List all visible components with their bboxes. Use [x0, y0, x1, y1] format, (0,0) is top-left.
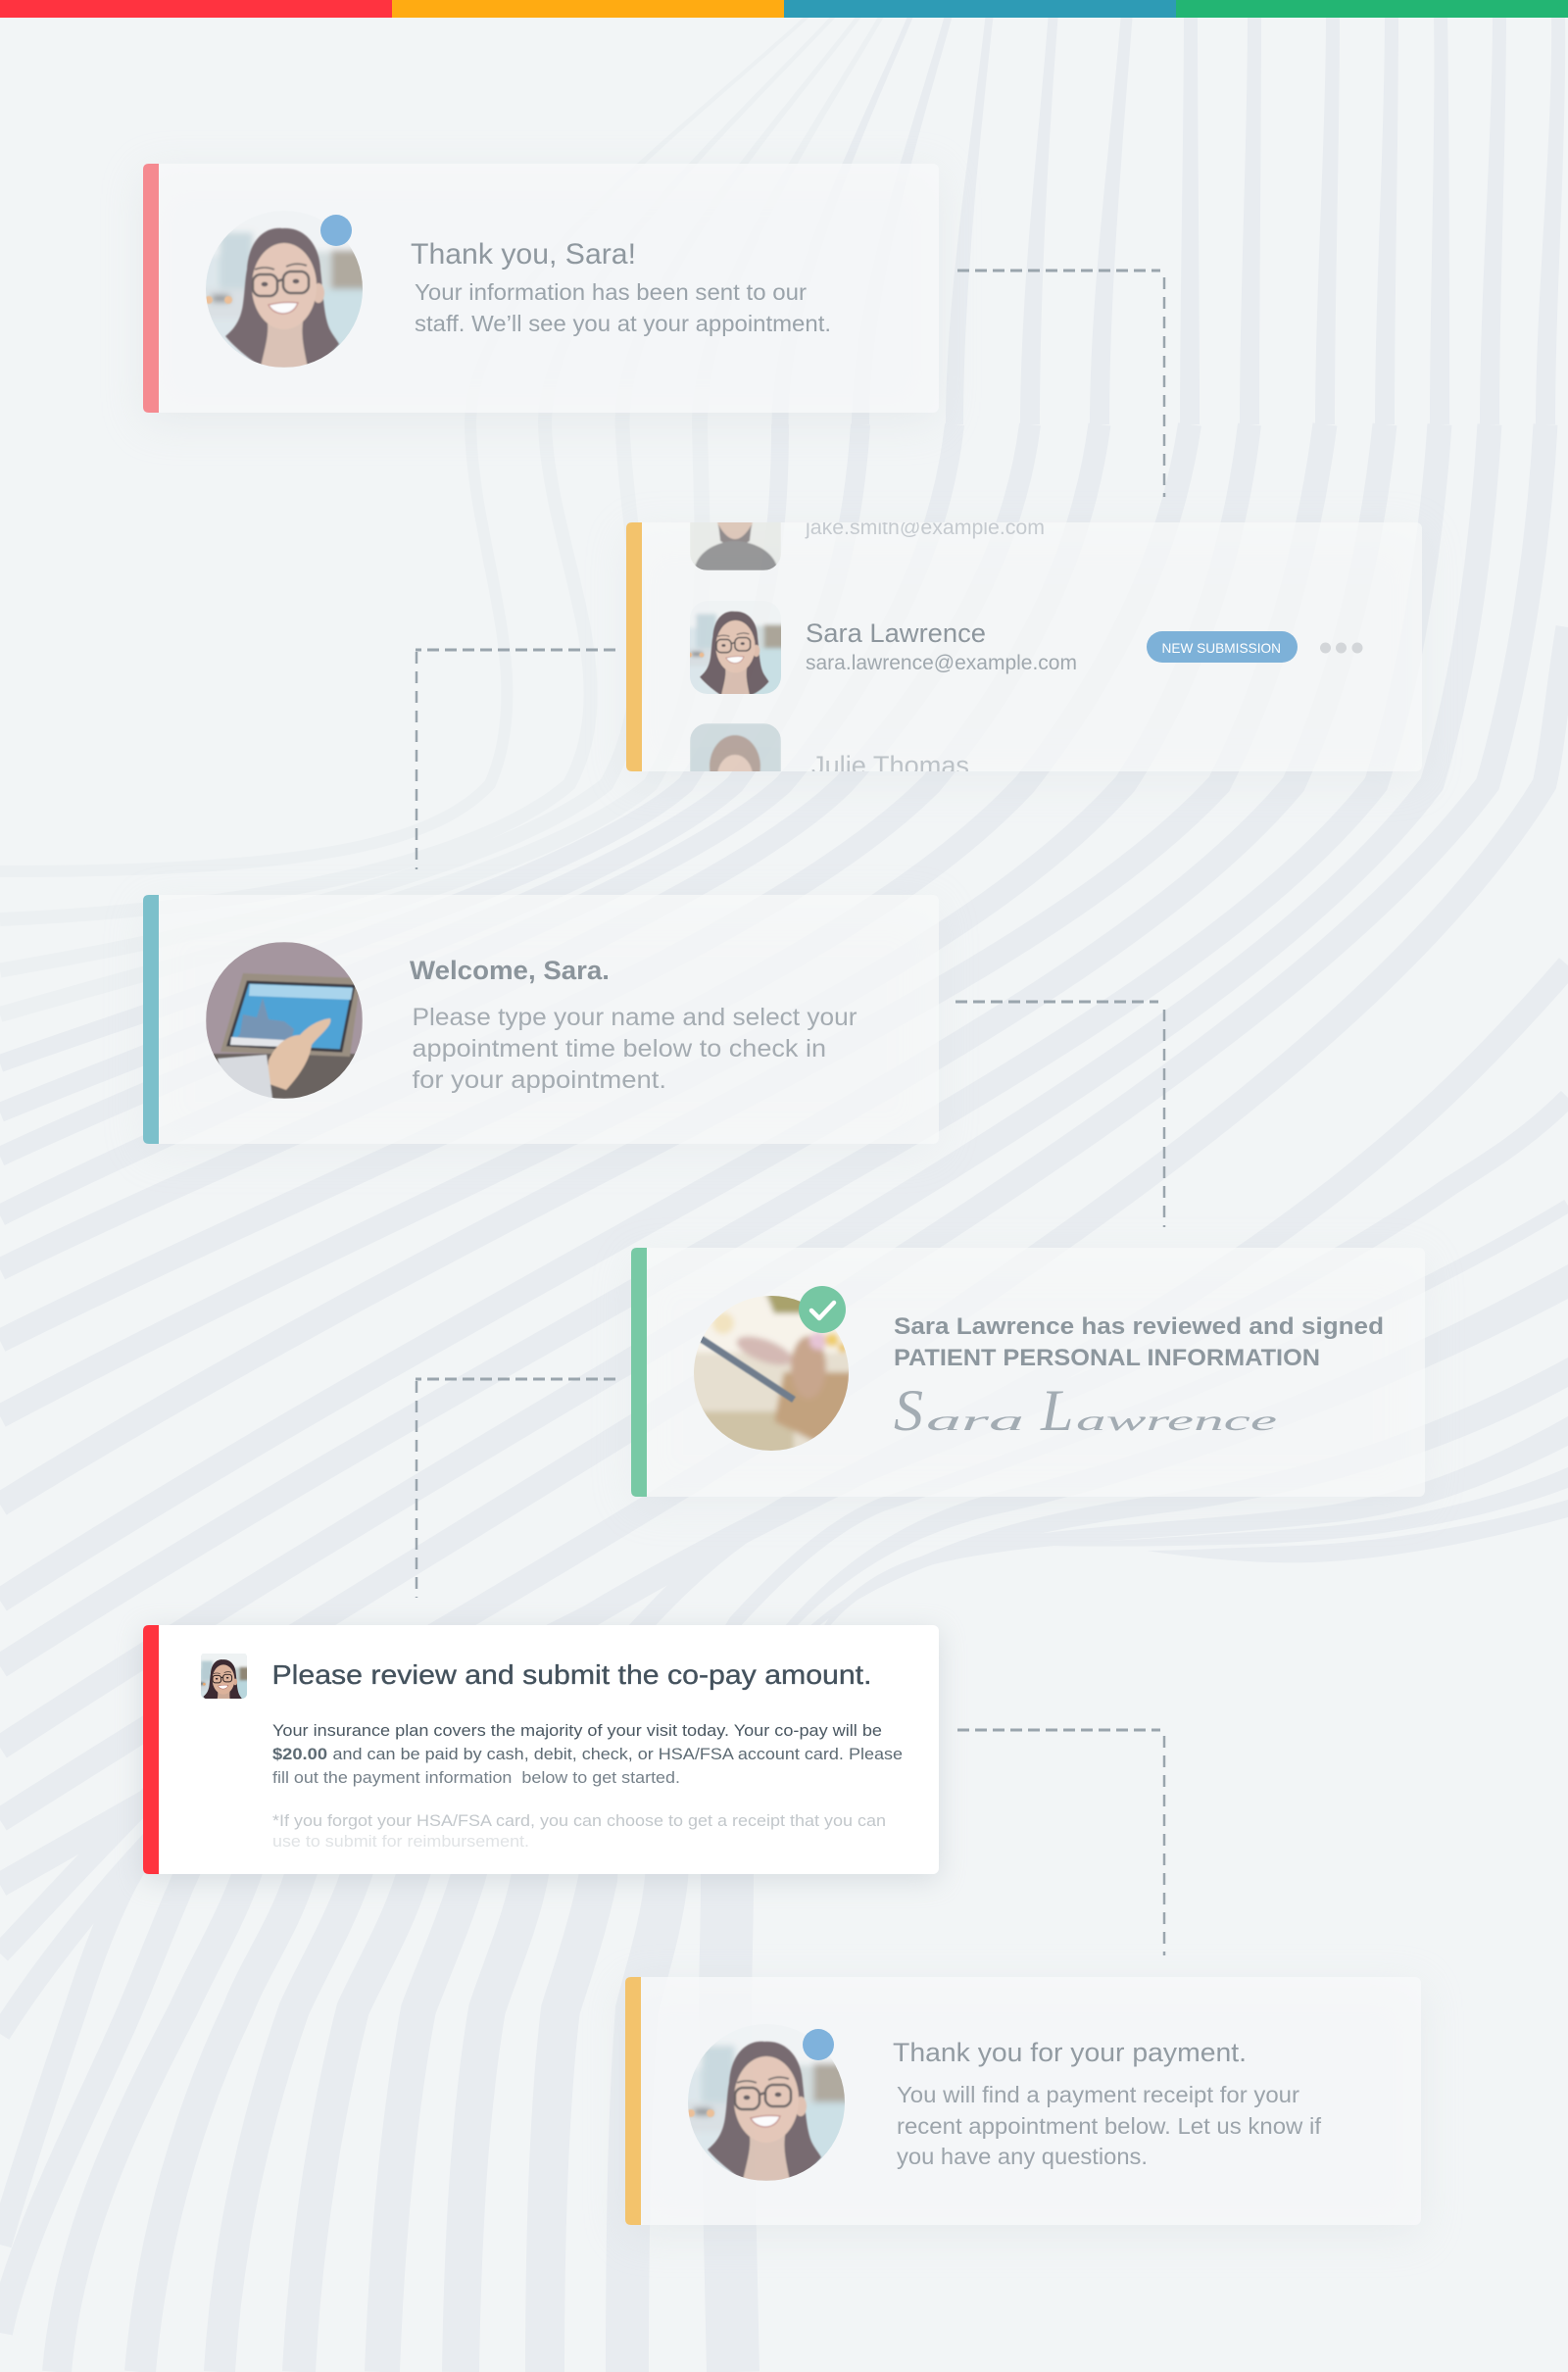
connector: card 3 to card 4: [956, 1002, 1164, 1227]
panel: payment thanks: recent appointment below. Let us know if: [897, 2113, 1322, 2139]
panel: co-pay review (active): and can be paid by cash, debit, check, or HSA/FSA account card. Please: [333, 1745, 903, 1763]
panel: welcome, Sara: Please type your name and select your: [412, 1004, 857, 1031]
panel: co-pay review (active): *If you forgot your HSA/FSA card, you can choose to get a receipt that you can: [272, 1811, 886, 1830]
panel: submissions list: sara.lawrence@example.com: [806, 652, 1077, 674]
panel: signed information: PATIENT PERSONAL INFORMATION: [894, 1345, 1320, 1371]
panel: signed information: Sara Lawrence has reviewed and signed: [894, 1313, 1384, 1340]
panel: thank you, Sara: staff. We’ll see you at your appointment.: [415, 311, 831, 336]
connector: card 4 to card 5: [416, 1379, 615, 1598]
photo: hand on tablet: [206, 942, 363, 1099]
panel: co-pay review (active): Please review and submit the co-pay amount.: [272, 1659, 872, 1690]
panel: payment thanks: [625, 1977, 1321, 2225]
panel: submissions list: NEW SUBMISSION: [1162, 640, 1281, 656]
connector: card 1 to card 2: [957, 271, 1164, 497]
panel: co-pay review (active): [143, 1625, 939, 1880]
signature: [894, 1378, 1277, 1443]
panel: co-pay review (active): use to submit for reimbursement.: [272, 1832, 529, 1851]
panel: co-pay review (active): fill out the payment information below to get started.: [272, 1768, 680, 1787]
panel: welcome, Sara: for your appointment.: [412, 1066, 666, 1094]
panel: thank you, Sara: Your information has been sent to our: [415, 279, 807, 305]
photo: hand with phone: [694, 1296, 849, 1451]
connector: card 2 to card 3: [416, 650, 615, 869]
panel: submissions list: jake.smith@example.com: [805, 517, 1045, 539]
panel: welcome, Sara: Welcome, Sara.: [410, 956, 610, 985]
connector: card 5 to card 6: [957, 1730, 1164, 1955]
panel: thank you, Sara: [143, 164, 939, 422]
panel: signed information: [631, 1248, 1425, 1507]
panel: submissions list: Sara Lawrence: [806, 618, 986, 648]
panel: welcome, Sara: appointment time below to check in: [412, 1035, 826, 1062]
panel: payment thanks: Thank you for your payment.: [893, 2038, 1247, 2067]
panel: submissions list: [626, 522, 1422, 771]
signature: ara: [926, 1405, 1024, 1437]
panel: payment thanks: You will find a payment receipt for your: [897, 2082, 1299, 2107]
top colour bar: [0, 0, 1568, 18]
signature: S: [894, 1378, 923, 1443]
panel: submissions list: Julie Thomas: [811, 751, 969, 780]
panel: welcome, Sara: [143, 895, 939, 1154]
avatar thumbnail: [201, 1654, 247, 1699]
panel: thank you, Sara: Thank you, Sara!: [411, 238, 636, 271]
signature: awrence: [1076, 1405, 1277, 1437]
panel: payment thanks: you have any questions.: [897, 2144, 1148, 2169]
icon: green check badge: [799, 1286, 846, 1333]
panel: co-pay review (active): $20.00: [272, 1745, 327, 1763]
panel: co-pay review (active): Your insurance plan covers the majority of your visit today. Your co-pay will be: [272, 1721, 882, 1740]
signature: L: [1040, 1378, 1073, 1443]
